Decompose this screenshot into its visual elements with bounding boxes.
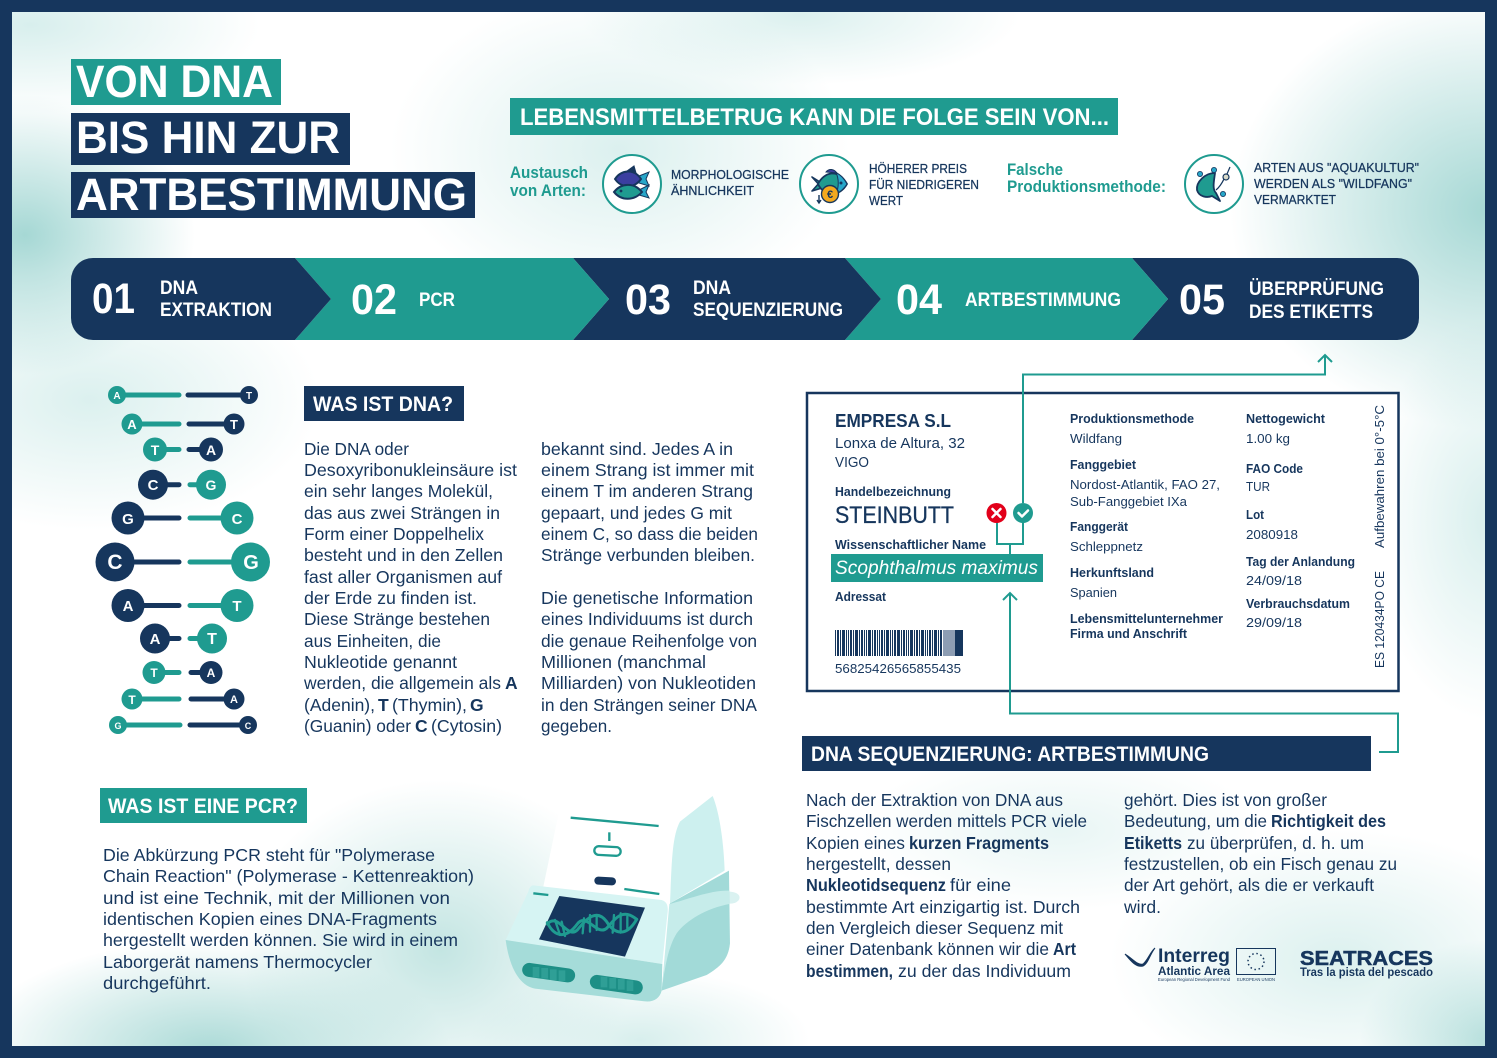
label: column 1 details: Wildfang bbox=[1070, 431, 1122, 446]
connector arrow: sequencing to scientific name bbox=[1003, 593, 1398, 752]
DNA ladder illustration: A bbox=[206, 442, 216, 458]
title bbox=[71, 56, 475, 220]
text: what is DNA column 2: gepaart, und jedes G mit bbox=[541, 503, 732, 523]
text: what is PCR: identischen Kopien eines DNA-Fragments bbox=[103, 909, 437, 929]
text: higher price bbox=[869, 162, 979, 208]
DNA ladder illustration: A bbox=[207, 666, 216, 680]
text: morphological similarity bbox=[671, 168, 789, 198]
barcode: 56825426565855435 bbox=[835, 661, 961, 676]
text: what is DNA column 1: Form einer Doppelhelix bbox=[304, 524, 484, 544]
text: what is DNA column 2: einem T im anderen Strang bbox=[541, 481, 753, 501]
text: aquaculture sold as wild: WERDEN ALS "WILDFANG" bbox=[1254, 177, 1412, 191]
label: scientific name bbox=[831, 537, 1043, 582]
label: vertical text: Aufbewahren bei 0°-5°C bbox=[1372, 405, 1387, 548]
text: sequencing column 1: Fischzellen werden mittels PCR viele bbox=[806, 811, 1087, 831]
DNA ladder illustration: A bbox=[113, 391, 121, 402]
heading: what is PCR: WAS IST EINE PCR? bbox=[108, 795, 298, 818]
text: sequencing column 1: für eine bbox=[950, 875, 1011, 895]
label: species substitution: von Arten: bbox=[510, 182, 586, 200]
text: what is DNA column 1: Desoxyribonukleinsäure ist bbox=[304, 460, 517, 480]
DNA ladder illustration bbox=[96, 386, 270, 734]
DNA ladder illustration: C bbox=[148, 477, 159, 494]
label: column 1 details: Firma und Anschrift bbox=[1070, 626, 1188, 641]
label: column 1 details bbox=[1070, 411, 1223, 641]
step 2: PCR bbox=[419, 290, 455, 311]
connector arrow: check to step 5 bbox=[1023, 355, 1332, 503]
text: what is DNA column 1: der Erde zu finden ist. bbox=[304, 588, 477, 608]
logo: Seatraces: SEATRACES bbox=[1300, 948, 1433, 970]
text: sequencing column 1: zu der das Individuum bbox=[898, 961, 1071, 981]
step 1: 01 bbox=[92, 275, 135, 323]
text: higher price: WERT bbox=[869, 194, 903, 208]
heading: what is DNA: WAS IST DNA? bbox=[313, 393, 453, 416]
text: sequencing column 2: festzustellen, ob ein Fisch genau zu bbox=[1124, 854, 1397, 874]
text: sequencing column 2: der Art gehört, als die er verkauft bbox=[1124, 875, 1374, 895]
icon: fish with euro coin: € bbox=[827, 189, 833, 201]
DNA ladder illustration: T bbox=[151, 442, 160, 458]
text: what is DNA column 1 bbox=[303, 439, 518, 736]
DNA ladder illustration: T bbox=[128, 693, 136, 707]
icon: green check bbox=[1013, 503, 1033, 523]
text: what is DNA column 1: (Thymin), bbox=[392, 695, 467, 715]
text: what is PCR: Die Abkürzung PCR steht für "Polymerase bbox=[103, 845, 435, 865]
text: higher price: FÜR NIEDRIGEREN bbox=[869, 178, 979, 192]
label: column 1 details: Spanien bbox=[1070, 585, 1117, 600]
logo: Seatraces bbox=[1300, 948, 1433, 979]
text: morphological similarity: MORPHOLOGISCHE bbox=[671, 168, 789, 182]
text: what is DNA column 1: werden, die allgemein als bbox=[303, 673, 501, 693]
text: sequencing column 2 bbox=[1123, 790, 1397, 917]
label: company address: VIGO bbox=[835, 455, 869, 471]
text: what is DNA column 1: T bbox=[378, 695, 389, 715]
text: what is PCR: und ist eine Technik, mit der Millionen von bbox=[103, 888, 450, 908]
text: sequencing column 1: kurzen Fragments bbox=[909, 833, 1049, 853]
text: sequencing column 1: bestimmen, bbox=[806, 961, 893, 981]
label: scientific name: Scophthalmus maximus bbox=[835, 558, 1038, 579]
DNA ladder illustration: C bbox=[232, 511, 243, 528]
text: what is DNA column 1: fast aller Organismen auf bbox=[304, 567, 502, 587]
logo: Interreg Atlantic Area: Atlantic Area bbox=[1158, 964, 1230, 978]
text: what is DNA column 2: in den Strängen seiner DNA bbox=[541, 695, 757, 715]
DNA ladder illustration: A bbox=[150, 631, 161, 648]
heading: what is DNA bbox=[304, 386, 464, 421]
text: what is DNA column 1: G bbox=[470, 695, 484, 715]
icon: hooked fish bbox=[1185, 155, 1243, 213]
text: sequencing column 1: Art bbox=[1053, 939, 1076, 959]
text: what is PCR: durchgeführt. bbox=[103, 973, 211, 993]
label: column 2 details: 29/09/18 bbox=[1246, 615, 1302, 630]
logo: Interreg Atlantic Area: European Regional Development Fund bbox=[1158, 977, 1230, 982]
label: trade name: STEINBUTT bbox=[835, 502, 954, 529]
title: VON DNA bbox=[76, 56, 273, 107]
label: column 1 details: Produktionsmethode bbox=[1070, 411, 1194, 426]
label: column 2 details: 24/09/18 bbox=[1246, 573, 1302, 588]
label: column 2 details: Tag der Anlandung bbox=[1246, 554, 1355, 569]
text: sequencing column 2: gehört. Dies ist von großer bbox=[1124, 790, 1327, 810]
text: sequencing column 2: zu überprüfen, d. h. um bbox=[1187, 833, 1364, 853]
text: what is DNA column 2: Stränge verbunden bleiben. bbox=[541, 545, 755, 565]
label: column 1 details: Sub-Fanggebiet IXa bbox=[1070, 494, 1188, 509]
label: company address: Lonxa de Altura, 32 bbox=[835, 436, 965, 452]
label: column 1 details: Lebensmittelunternehmer bbox=[1070, 611, 1223, 626]
label: column 2 details bbox=[1246, 411, 1355, 630]
text: what is DNA column 1: Die DNA oder bbox=[304, 439, 409, 459]
step 4: 04 bbox=[896, 276, 942, 324]
title: ARTBESTIMMUNG bbox=[76, 169, 467, 220]
DNA ladder illustration: A bbox=[127, 417, 137, 432]
step 1 bbox=[71, 258, 331, 340]
label: company address bbox=[835, 411, 965, 471]
icon: two fish bbox=[603, 155, 661, 213]
label: column 1 details: Nordost-Atlantik, FAO 27, bbox=[1070, 477, 1220, 492]
DNA ladder illustration: T bbox=[150, 666, 158, 680]
DNA ladder illustration: T bbox=[230, 417, 238, 432]
step 2 bbox=[295, 258, 609, 340]
heading: food fraud: LEBENSMITTELBETRUG KANN DIE FOLGE SEIN VON... bbox=[520, 104, 1109, 131]
DNA ladder illustration: A bbox=[123, 598, 134, 615]
DNA ladder illustration: G bbox=[122, 511, 134, 528]
label: species substitution bbox=[510, 164, 588, 200]
step 5: 05 bbox=[1179, 276, 1225, 324]
text: what is PCR: hergestellt werden können. Sie wird in einem bbox=[103, 930, 458, 950]
label: false production method: Falsche bbox=[1007, 161, 1063, 179]
text: sequencing column 1: Kopien eines bbox=[806, 833, 905, 853]
text: sequencing column 2: Bedeutung, um die bbox=[1124, 811, 1267, 831]
label: column 1 details: Fanggebiet bbox=[1070, 457, 1137, 472]
text: what is DNA column 2: einem C, so dass die beiden bbox=[541, 524, 758, 544]
text: sequencing column 1: hergestellt, dessen bbox=[806, 854, 951, 874]
DNA ladder illustration: G bbox=[206, 477, 217, 493]
text: what is DNA column 2: eines Individuums ist durch bbox=[541, 609, 753, 629]
text: sequencing column 1: Nukleotidsequenz bbox=[806, 875, 946, 895]
text: what is DNA column 2: Die genetische Information bbox=[541, 588, 753, 608]
label: column 1 details: Fanggerät bbox=[1070, 519, 1129, 534]
text: what is DNA column 2: einem Strang ist immer mit bbox=[541, 460, 754, 480]
label: column 2 details: 1.00 kg bbox=[1246, 431, 1290, 446]
step 1: EXTRAKTION bbox=[160, 300, 272, 321]
text: sequencing column 2: wird. bbox=[1123, 897, 1161, 917]
text: sequencing column 1: einer Datenbank können wir die bbox=[806, 939, 1049, 959]
text: what is DNA column 1: Diese Stränge bestehen bbox=[304, 609, 490, 629]
step 1: DNA bbox=[160, 278, 198, 299]
label: column 1 details: Schleppnetz bbox=[1070, 539, 1143, 554]
DNA ladder illustration: T bbox=[246, 391, 252, 402]
text: what is DNA column 1: Nukleotide genannt bbox=[304, 652, 457, 672]
text: what is DNA column 2: Millionen (manchmal bbox=[541, 652, 706, 672]
text: aquaculture sold as wild: ARTEN AUS "AQUAKULTUR" bbox=[1254, 161, 1419, 175]
heading: DNA sequencing bbox=[802, 736, 1371, 771]
text: what is DNA column 2: gegeben. bbox=[541, 716, 612, 736]
text: higher price: HÖHERER PREIS bbox=[869, 162, 967, 176]
text: what is PCR: Laborgerät namens Thermocycler bbox=[103, 952, 372, 972]
text: what is DNA column 1: (Cytosin) bbox=[431, 716, 502, 736]
step 3 bbox=[573, 258, 881, 340]
step 5: DES ETIKETTS bbox=[1249, 302, 1373, 323]
label: addressee: Adressat bbox=[835, 589, 887, 604]
text: what is PCR: Chain Reaction" (Polymerase - Kettenreaktion) bbox=[103, 866, 474, 886]
label: vertical text: ES 120434PO CE bbox=[1372, 571, 1387, 668]
icon: red cross bbox=[986, 503, 1006, 523]
text: sequencing column 2: Richtigkeit des bbox=[1271, 811, 1386, 831]
step 4 bbox=[845, 258, 1168, 340]
DNA ladder illustration: T bbox=[232, 598, 242, 615]
label: column 2 details: Lot bbox=[1246, 507, 1265, 522]
text: what is DNA column 2: die genaue Reihenfolge von bbox=[541, 631, 757, 651]
logo: Interreg Atlantic Area bbox=[1125, 946, 1276, 983]
heading: what is PCR bbox=[100, 788, 307, 823]
label: column 2 details: FAO Code bbox=[1246, 461, 1303, 476]
label: column 2 details: TUR bbox=[1246, 479, 1270, 494]
step 2: 02 bbox=[351, 276, 397, 324]
icon: fish with euro coin bbox=[800, 155, 858, 213]
process chevrons bbox=[71, 258, 1419, 340]
text: sequencing column 1: bestimmte Art einzigartig ist. Durch bbox=[806, 897, 1080, 917]
text: what is DNA column 1: aus Einheiten, die bbox=[304, 631, 441, 651]
text: sequencing column 1: den Vergleich dieser Sequenz mit bbox=[806, 918, 1063, 938]
DNA ladder illustration: G bbox=[114, 721, 122, 731]
label: company address: EMPRESA S.L bbox=[835, 411, 951, 431]
text: what is PCR bbox=[103, 845, 474, 993]
text: what is DNA column 1: ein sehr langes Molekül, bbox=[304, 481, 493, 501]
text: what is DNA column 1: besteht und in den Zellen bbox=[304, 545, 503, 565]
DNA ladder illustration: G bbox=[243, 552, 259, 574]
logo: Interreg Atlantic Area: EUROPEAN UNION bbox=[1237, 977, 1275, 983]
text: what is DNA column 1: C bbox=[415, 716, 428, 736]
illustration: thermocycler bbox=[506, 796, 740, 1002]
step 5 bbox=[1132, 258, 1419, 340]
step 3: SEQUENZIERUNG bbox=[693, 300, 843, 321]
text: what is DNA column 2 bbox=[541, 439, 758, 736]
label: column 2 details: Verbrauchsdatum bbox=[1246, 596, 1350, 611]
text: what is DNA column 2: bekannt sind. Jedes A in bbox=[541, 439, 733, 459]
product label bbox=[807, 393, 1398, 691]
heading: DNA sequencing: DNA SEQUENZIERUNG: ARTBESTIMMUNG bbox=[811, 743, 1209, 766]
text: sequencing column 1: Nach der Extraktion von DNA aus bbox=[806, 790, 1063, 810]
label: species substitution: Austausch bbox=[510, 164, 588, 182]
text: sequencing column 2: Etiketts bbox=[1124, 833, 1182, 853]
text: sequencing column 1 bbox=[806, 790, 1087, 981]
step 4: ARTBESTIMMUNG bbox=[965, 290, 1121, 311]
step 3: 03 bbox=[625, 276, 671, 324]
label: false production method bbox=[1007, 161, 1166, 196]
label: vertical text bbox=[1372, 405, 1387, 668]
step 5: ÜBERPRÜFUNG bbox=[1249, 279, 1384, 300]
DNA ladder illustration: C bbox=[245, 721, 252, 731]
DNA ladder illustration: T bbox=[207, 631, 217, 648]
text: what is DNA column 2: Milliarden) von Nukleotiden bbox=[541, 673, 756, 693]
text: what is DNA column 1: (Adenin), bbox=[304, 695, 375, 715]
text: what is DNA column 1: das aus zwei Strängen in bbox=[304, 503, 500, 523]
text: aquaculture sold as wild bbox=[1254, 161, 1419, 207]
text: aquaculture sold as wild: VERMARKTET bbox=[1254, 193, 1336, 207]
label: trade name: Handelbezeichnung bbox=[835, 484, 951, 499]
DNA ladder illustration: C bbox=[107, 551, 123, 574]
step 3: DNA bbox=[693, 278, 731, 299]
text: what is DNA column 1: A bbox=[505, 673, 518, 693]
logo: Interreg Atlantic Area: Interreg bbox=[1158, 946, 1230, 967]
label: column 2 details: Nettogewicht bbox=[1246, 411, 1326, 426]
label: trade name bbox=[835, 484, 954, 529]
heading: food fraud bbox=[510, 98, 1118, 135]
label: scientific name: Wissenschaftlicher Name bbox=[835, 537, 986, 552]
text: morphological similarity: ÄHNLICHKEIT bbox=[671, 184, 754, 198]
label: false production method: Produktionsmethode: bbox=[1007, 178, 1166, 196]
connector bracket bbox=[997, 522, 1023, 554]
title: BIS HIN ZUR bbox=[76, 112, 340, 163]
barcode bbox=[835, 630, 963, 676]
DNA ladder illustration: A bbox=[230, 694, 238, 706]
label: column 1 details: Herkunftsland bbox=[1070, 565, 1154, 580]
logo: Seatraces: Tras la pista del pescado bbox=[1300, 967, 1433, 979]
label: column 2 details: 2080918 bbox=[1246, 527, 1298, 542]
text: what is DNA column 1: (Guanin) oder bbox=[304, 716, 411, 736]
